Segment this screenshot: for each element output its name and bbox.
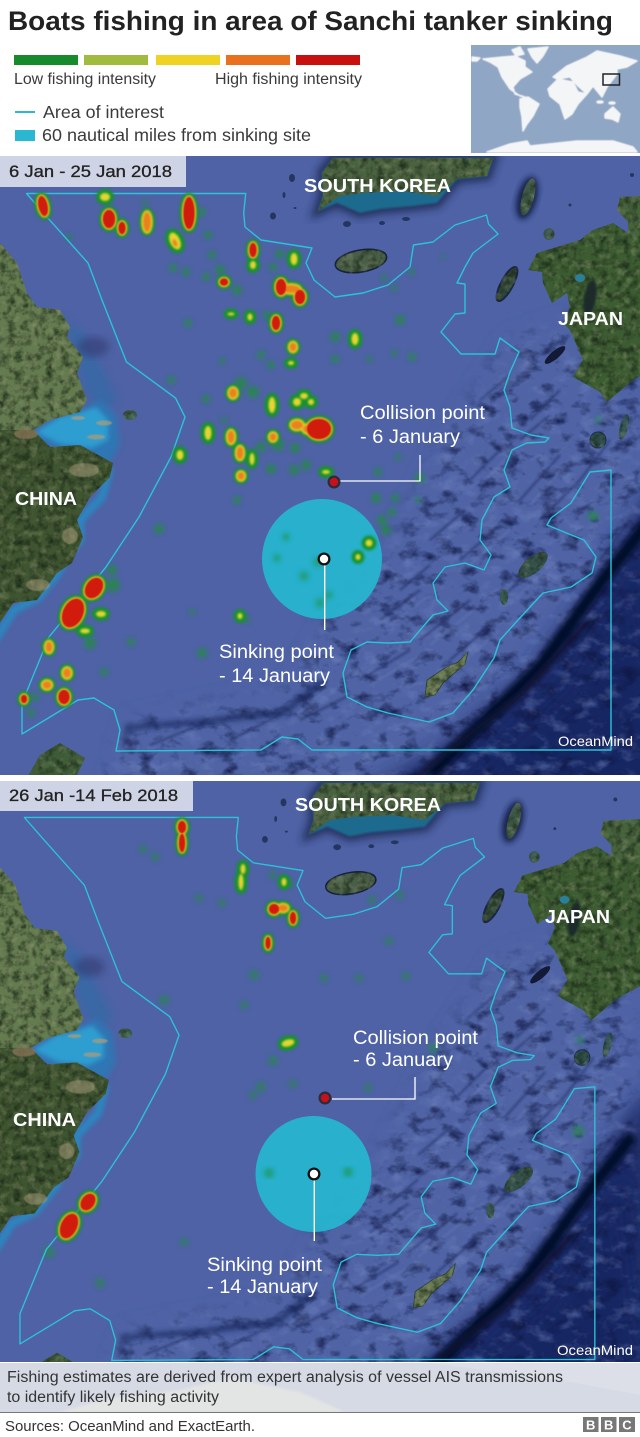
BBC logo: C — [622, 1418, 632, 1432]
annotation: collision point map 2: - 6 January — [353, 1050, 454, 1071]
country label: Japan map 2: JAPAN — [545, 907, 610, 927]
country label: China map 1: CHINA — [15, 489, 77, 509]
leader: collision point — [332, 1077, 415, 1099]
low label: Low fishing intensity — [14, 71, 156, 88]
radius label: 60 nautical miles from sinking site — [42, 125, 311, 145]
high intensity swatch — [296, 55, 360, 65]
country label: South Korea map 2: SOUTH KOREA — [295, 795, 441, 815]
circle colour key — [15, 130, 35, 141]
fishing intensity heatmap — [56, 821, 296, 1241]
BBC logo: B — [586, 1418, 595, 1432]
marker: collision point — [318, 1092, 332, 1104]
title: Boats fishing in area of Sanchi tanker sinking — [8, 6, 613, 36]
satellite base map — [0, 150, 640, 800]
credit: OceanMind map 2: OceanMind — [557, 1342, 633, 1358]
area line key — [15, 111, 35, 113]
area of interest boundary — [20, 817, 595, 1360]
credit: OceanMind map 1: OceanMind — [558, 733, 633, 749]
date label: map 2 — [0, 781, 193, 811]
leader: collision point — [340, 455, 420, 481]
country label: Japan map 1: JAPAN — [558, 309, 623, 329]
footnote text — [7, 1369, 563, 1406]
sixty nautical mile circle — [262, 499, 382, 619]
marker: sinking point — [318, 552, 330, 566]
BBC logo: B — [604, 1418, 613, 1432]
annotation: collision point map 1: - 6 January — [360, 427, 461, 448]
country label: South Korea map 1: SOUTH KOREA — [304, 176, 451, 196]
date label: map 1 — [0, 156, 186, 187]
legend: 60 nautical miles — [15, 125, 311, 145]
annotation: sinking point map 1: - 14 January — [219, 666, 331, 687]
dim heat spots outside circle — [27, 200, 601, 717]
marker: sinking point — [308, 1168, 320, 1180]
annotation: sinking point map 1 — [219, 642, 335, 687]
footnote panel — [0, 1363, 640, 1412]
dim heat spots outside circle — [43, 845, 584, 1288]
high label: High fishing intensity — [215, 71, 362, 88]
panel: map 26 Jan - 14 Feb 2018 — [0, 775, 640, 1408]
satellite base map — [0, 775, 640, 1408]
sixty nautical mile circle — [256, 1116, 372, 1232]
locator box — [603, 74, 620, 85]
country label: China map 2: CHINA — [13, 1110, 76, 1130]
leader: sinking point — [324, 559, 325, 630]
mid-high intensity swatch — [226, 55, 290, 65]
annotation: sinking point map 2: - 14 January — [207, 1277, 319, 1298]
annotation: collision point map 2: Collision point — [353, 1028, 479, 1049]
annotation: sinking point map 2: Sinking point — [207, 1255, 323, 1276]
annotation: collision point map 2 — [353, 1028, 479, 1071]
dim heat spots inside circle — [273, 533, 333, 608]
area label: Area of interest — [43, 102, 164, 122]
date label: map 2: 26 Jan -14 Feb 2018 — [9, 787, 178, 805]
legend: fishing intensity scale — [14, 55, 362, 88]
annotation: collision point map 1: Collision point — [360, 403, 486, 424]
sources: Sources: OceanMind and ExactEarth. — [5, 1418, 255, 1435]
footnote text: Fishing estimates are derived from expert analysis of vessel AIS transmissions — [7, 1369, 563, 1386]
dim heat spots inside circle — [264, 1167, 353, 1178]
annotation: collision point map 1 — [360, 403, 486, 448]
annotation: sinking point map 2 — [207, 1255, 323, 1298]
marker: collision point — [328, 476, 340, 488]
footnote text: to identify likely fishing activity — [7, 1389, 219, 1406]
panel: map 6 Jan - 25 Jan 2018 — [0, 150, 640, 800]
date label: map 1: 6 Jan - 25 Jan 2018 — [9, 163, 172, 181]
low-mid intensity swatch — [84, 55, 148, 65]
fishing intensity heatmap — [21, 193, 372, 704]
mid intensity swatch — [156, 55, 220, 65]
leader: sinking point — [314, 1174, 315, 1241]
area of interest boundary — [22, 194, 611, 751]
annotation: sinking point map 1: Sinking point — [219, 642, 335, 663]
low intensity swatch — [14, 55, 78, 65]
inset world map — [471, 45, 640, 153]
BBC logo — [583, 1417, 635, 1432]
